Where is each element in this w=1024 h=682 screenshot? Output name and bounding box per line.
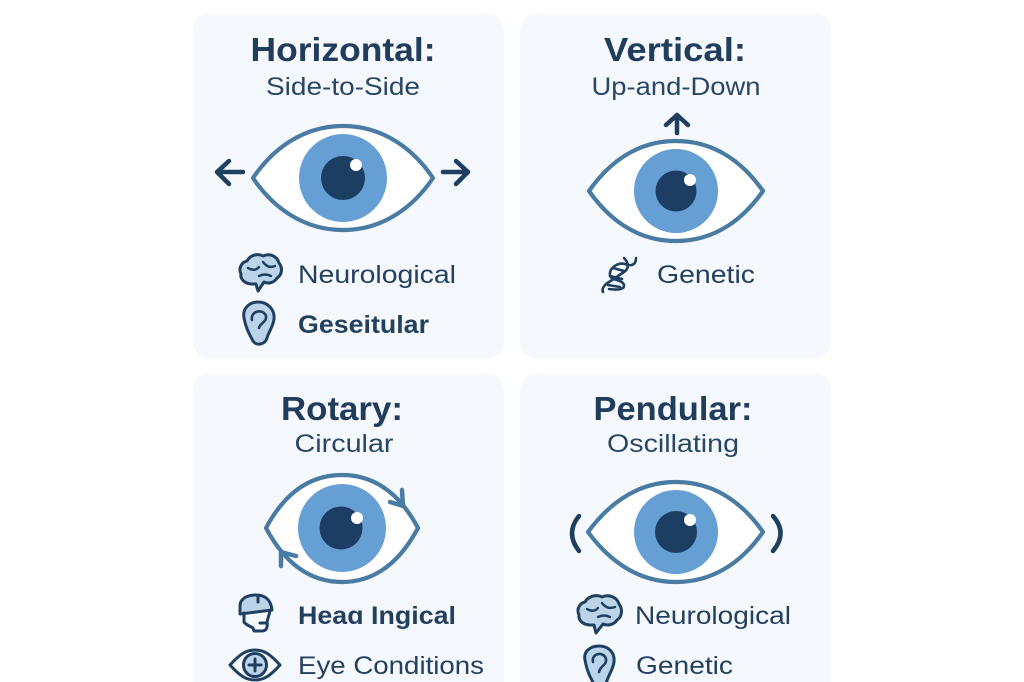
- subheading: side-to-side: Side-to-Side: [266, 73, 420, 101]
- arrow: right: [443, 161, 468, 184]
- panel: horizontal: [193, 14, 504, 358]
- heading: horizontal: Horizontal:: [250, 31, 436, 68]
- arrow: clockwise top: [390, 490, 403, 506]
- icon: ear: [585, 646, 614, 682]
- heading: pendular: Pendular:: [594, 390, 752, 427]
- panel: pendular: [520, 374, 831, 682]
- icon: eye pendular: [588, 482, 763, 582]
- label: geseitular: Geseitular: [298, 311, 429, 339]
- label: head ingical: Heaɑ Ingical: [298, 602, 456, 630]
- subheading: circular: Circular: [294, 430, 394, 458]
- arrow: left: [217, 161, 243, 184]
- arrow: swing right: [773, 516, 780, 551]
- label: neurological: Neurological: [635, 602, 791, 630]
- subheading: up-and-down: Up-and-Down: [592, 73, 760, 101]
- arrow: swing left: [572, 516, 579, 551]
- heading: vertical: Vertical:: [604, 31, 746, 68]
- subheading: oscillating: Oscillating: [607, 430, 739, 458]
- arrow: up: [666, 115, 688, 133]
- panel: rotary: [193, 374, 504, 682]
- arrow: clockwise bottom: [281, 552, 296, 566]
- icon: head: [240, 595, 272, 631]
- icon: eye rotary: [266, 475, 418, 582]
- heading: rotary: Rotary:: [281, 390, 403, 427]
- icon: eye vertical: [589, 141, 763, 241]
- label: neurological: Neurological: [298, 261, 456, 289]
- label: eye conditions: Eye Conditions: [298, 652, 484, 680]
- icon: brain: [240, 255, 281, 291]
- icon: dna: [603, 258, 636, 292]
- icon: brain: [578, 596, 621, 633]
- panel: vertical: [520, 14, 831, 358]
- icon: ear: [244, 302, 274, 344]
- label: genetic: Genetic: [636, 652, 733, 680]
- icon: eye conditions: [230, 650, 280, 680]
- label: genetic: Genetic: [657, 261, 755, 289]
- icon: eye horizontal: [253, 126, 433, 230]
